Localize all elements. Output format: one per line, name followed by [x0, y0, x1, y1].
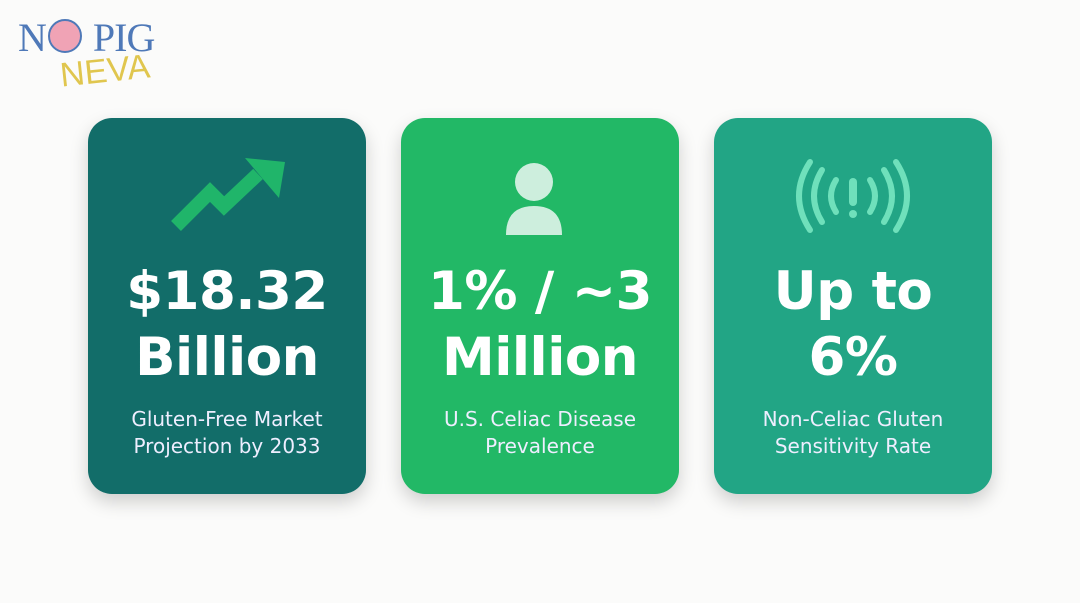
value: 1% / ~3: [428, 261, 652, 322]
card: market: [88, 118, 366, 494]
logo: NEVA: [58, 47, 152, 95]
caption: [131, 407, 323, 458]
caption: Prevalence: [485, 434, 595, 458]
icon: alert signal: [796, 159, 910, 233]
caption: Sensitivity Rate: [775, 434, 931, 458]
value: 6%: [808, 327, 897, 388]
caption: Non-Celiac Gluten: [763, 407, 943, 431]
value: [126, 261, 328, 388]
value: $18.32: [126, 261, 328, 322]
value: Million: [442, 327, 638, 388]
caption: Gluten-Free Market: [131, 407, 323, 431]
caption: Projection by 2033: [133, 434, 321, 458]
caption: U.S. Celiac Disease: [444, 407, 636, 431]
icon: trend arrow: [171, 158, 285, 231]
card: sensitivity: [714, 118, 992, 494]
logo: N PIG: [18, 15, 154, 60]
value: Billion: [135, 327, 319, 388]
icon: person: [506, 163, 562, 235]
card: celiac: [401, 118, 679, 494]
caption: [444, 407, 636, 458]
value: Up to: [774, 261, 932, 322]
value: [774, 261, 932, 388]
value: [428, 261, 652, 388]
logo: [18, 15, 154, 95]
caption: [763, 407, 943, 458]
